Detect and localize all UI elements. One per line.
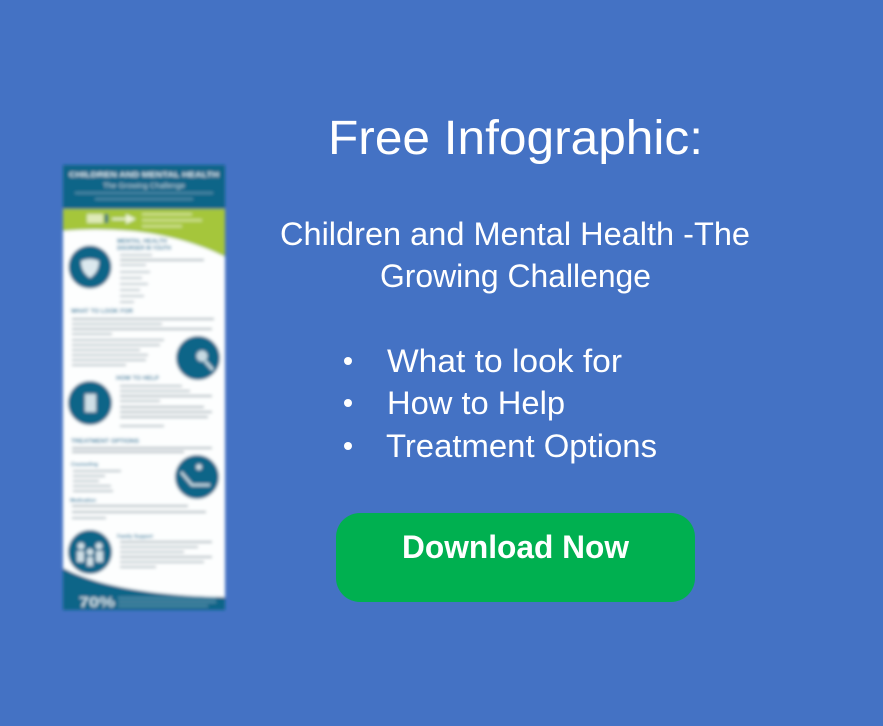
icon: magnifying glass circle — [176, 336, 220, 380]
section: treatment options: TREATMENT OPTIONS — [71, 438, 139, 445]
thumbnail page — [63, 165, 225, 610]
download button: Download Now — [402, 529, 629, 565]
bullet list: Treatment Options — [386, 428, 657, 464]
bullet list: What to look for — [387, 343, 622, 379]
thumbnail footer: 70% — [79, 594, 115, 611]
section: mental health issues list — [117, 239, 204, 303]
download button — [336, 513, 695, 602]
thumbnail header — [63, 165, 225, 209]
section: mental health issues list: DISORDER IN YOUTH — [117, 246, 171, 252]
icon: therapy couch circle — [175, 455, 219, 499]
icon: clipboard circle — [68, 381, 112, 425]
section: how to help — [116, 375, 212, 427]
section: family support — [117, 534, 212, 568]
section: what to look for: WHAT TO LOOK FOR — [71, 308, 134, 315]
section: counseling — [71, 462, 121, 492]
section: counseling: Counseling — [71, 462, 98, 468]
subtitle: Growing Challenge — [380, 258, 651, 294]
thumbnail header: The Growing Challenge — [103, 183, 185, 190]
section: how to help: HOW TO HELP — [116, 375, 159, 382]
section: mental health issues list: MENTAL HEALTH — [117, 239, 167, 245]
subtitle: Children and Mental Health -The — [280, 216, 750, 252]
section: medication: Medication — [70, 498, 96, 504]
section: medication — [70, 498, 206, 519]
section: family support: Family Support — [117, 534, 153, 540]
thumbnail header: CHILDREN AND MENTAL HEALTH — [69, 170, 219, 179]
thumbnail footer — [63, 568, 225, 611]
blurred infographic thumbnail — [63, 165, 225, 611]
bullet list — [344, 343, 657, 464]
bullet list: How to Help — [387, 385, 565, 421]
title: Free Infographic: — [328, 112, 703, 165]
subtitle — [280, 216, 750, 294]
icon: mask circle — [68, 246, 112, 288]
icon: family circle — [68, 530, 112, 574]
thumbnail green band — [63, 209, 225, 257]
